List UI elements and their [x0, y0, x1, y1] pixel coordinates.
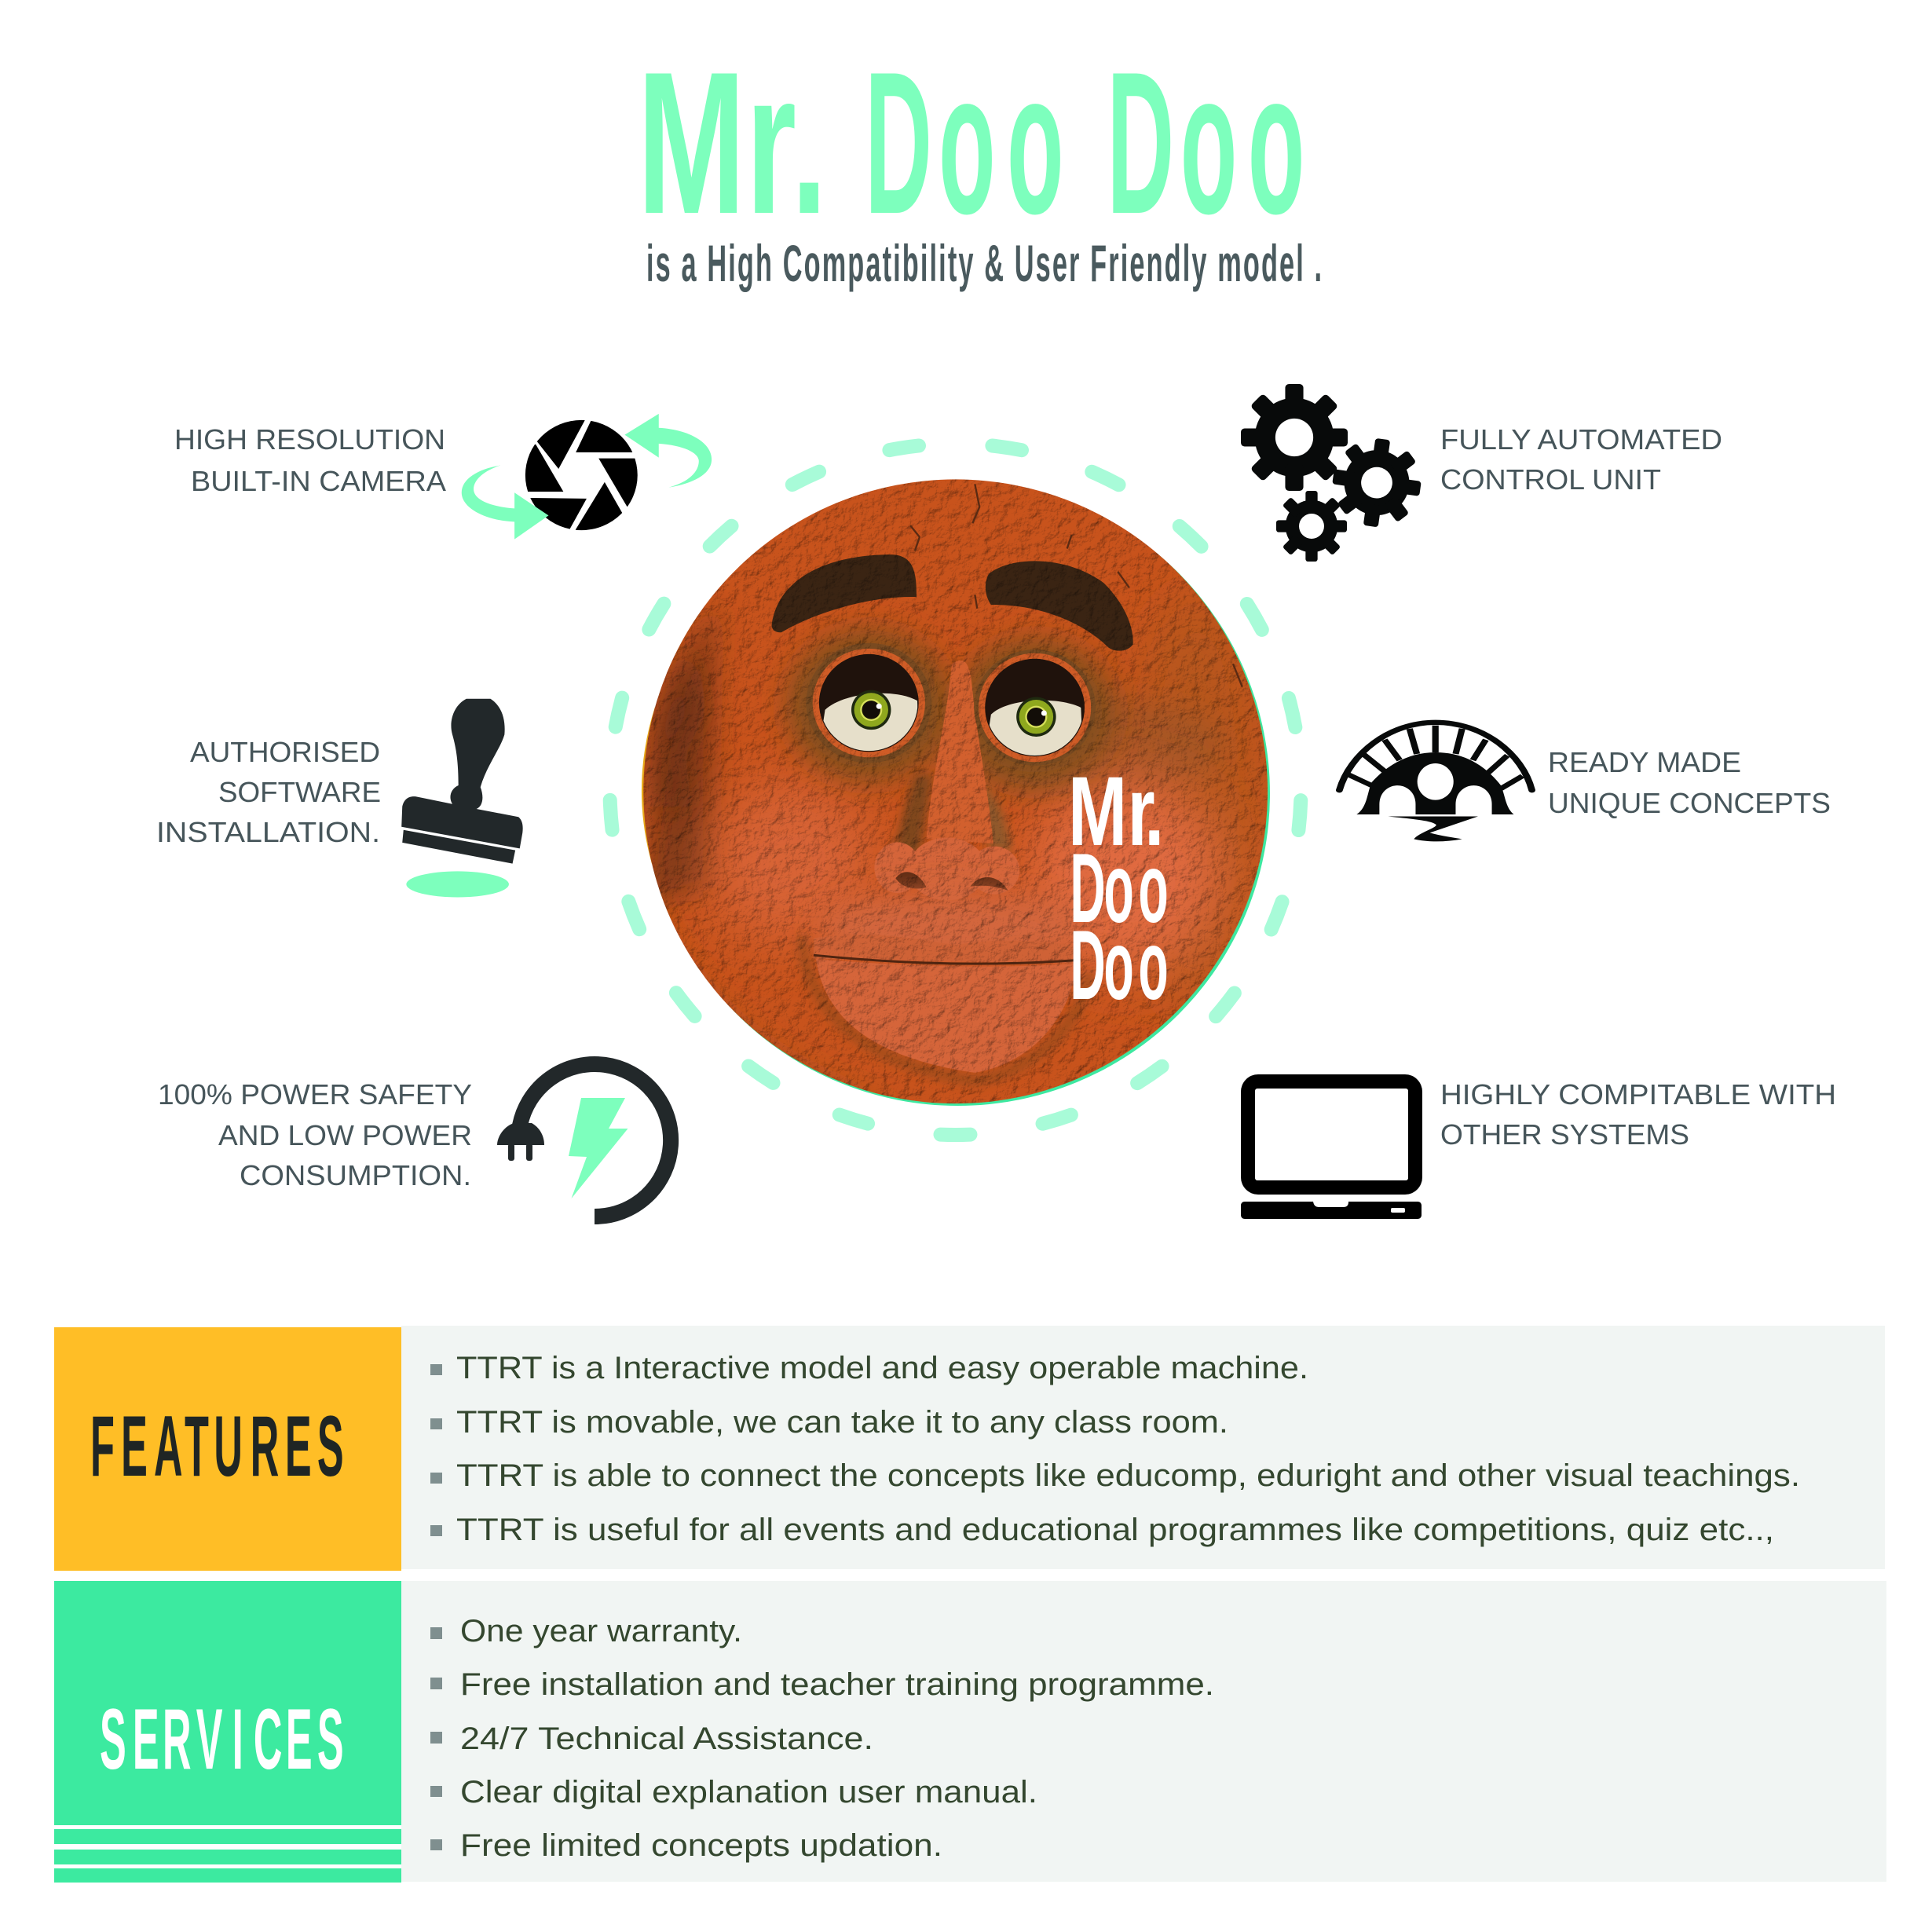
icon: power plug with bolt — [497, 1064, 671, 1217]
label: compatible: HIGHLY COMPITABLE WITH — [1440, 1078, 1836, 1111]
left eye — [818, 654, 920, 756]
features list: TTRT is a Interactive model and easy operable machine. — [456, 1351, 1308, 1385]
services list: Free limited concepts updation. — [460, 1828, 942, 1863]
face photo — [643, 478, 1270, 1107]
services list: Clear digital explanation user manual. — [460, 1775, 1037, 1809]
services list: Free installation and teacher training programme. — [460, 1667, 1214, 1702]
features heading block — [54, 1327, 401, 1571]
face logo text: Mr. — [1068, 757, 1164, 867]
icon: rubber stamp — [401, 699, 523, 897]
label: software: AUTHORISED — [190, 736, 380, 768]
label: power — [158, 1078, 472, 1191]
title: Doo — [865, 29, 1064, 256]
services list: 24/7 Technical Assistance. — [460, 1722, 873, 1756]
features list: TTRT is useful for all events and educational programmes like competitions, quiz etc.., — [456, 1513, 1774, 1547]
label: concepts — [1548, 746, 1831, 819]
label: software — [156, 736, 381, 848]
features list — [430, 1351, 1800, 1547]
icon: camera shutter with rotation arrows — [462, 414, 712, 540]
services list — [430, 1614, 1214, 1863]
services list: One year warranty. — [460, 1614, 742, 1648]
label: software: SOFTWARE — [218, 776, 381, 808]
label: software: INSTALLATION. — [156, 816, 380, 848]
face logo text: Doo — [1070, 833, 1169, 943]
icon: gears — [1241, 384, 1426, 562]
clay surface — [643, 478, 1270, 1107]
label: compatible: OTHER SYSTEMS — [1440, 1118, 1689, 1151]
label: concepts: UNIQUE CONCEPTS — [1548, 787, 1831, 819]
face logo text — [1068, 757, 1169, 1020]
central face illustration — [642, 478, 1270, 1107]
label: compatible — [1440, 1078, 1836, 1151]
title — [638, 29, 1304, 256]
label: automated: CONTROL UNIT — [1440, 463, 1661, 496]
icon: arch bridge concepts — [1339, 723, 1532, 841]
features list: TTRT is movable, we can take it to any class room. — [456, 1405, 1228, 1440]
title: Doo — [1107, 29, 1304, 256]
features heading: FEATURES — [90, 1398, 344, 1495]
face rim gold — [642, 707, 655, 864]
label: camera — [174, 423, 446, 497]
services heading: SERVICES — [100, 1691, 344, 1787]
services background — [401, 1581, 1886, 1882]
arrow: lower left — [462, 465, 548, 540]
title: Mr. — [638, 30, 827, 256]
label: power: 100% POWER SAFETY — [158, 1078, 472, 1111]
services heading block — [54, 1581, 401, 1825]
subtitle: is a High Compatibility & User Friendly model . — [646, 235, 1322, 293]
label: camera: BUILT-IN CAMERA — [191, 465, 446, 497]
cracks — [910, 484, 1242, 687]
label: concepts: READY MADE — [1548, 746, 1741, 778]
stamp imprint — [406, 871, 509, 897]
label: power: AND LOW POWER — [218, 1119, 472, 1151]
icon: laptop — [1241, 1074, 1422, 1219]
label: automated: FULLY AUTOMATED — [1440, 423, 1722, 456]
face logo text: Doo — [1070, 910, 1169, 1020]
right eye — [984, 659, 1085, 760]
mouth line — [814, 955, 1076, 964]
arrow: upper right — [624, 414, 712, 488]
label: automated — [1440, 423, 1722, 496]
services stripes — [54, 1829, 401, 1883]
face rim — [646, 481, 1270, 1106]
panel: features — [54, 1326, 1885, 1571]
label: power: CONSUMPTION. — [240, 1159, 471, 1191]
label: camera: HIGH RESOLUTION — [174, 423, 445, 456]
dashed ring — [595, 429, 1315, 1150]
lightning bolt — [569, 1098, 628, 1198]
features background — [401, 1326, 1885, 1569]
panel: services — [54, 1581, 1886, 1883]
features list: TTRT is able to connect the concepts like educomp, eduright and other visual teachings. — [456, 1458, 1800, 1493]
shutter blades — [525, 419, 638, 531]
